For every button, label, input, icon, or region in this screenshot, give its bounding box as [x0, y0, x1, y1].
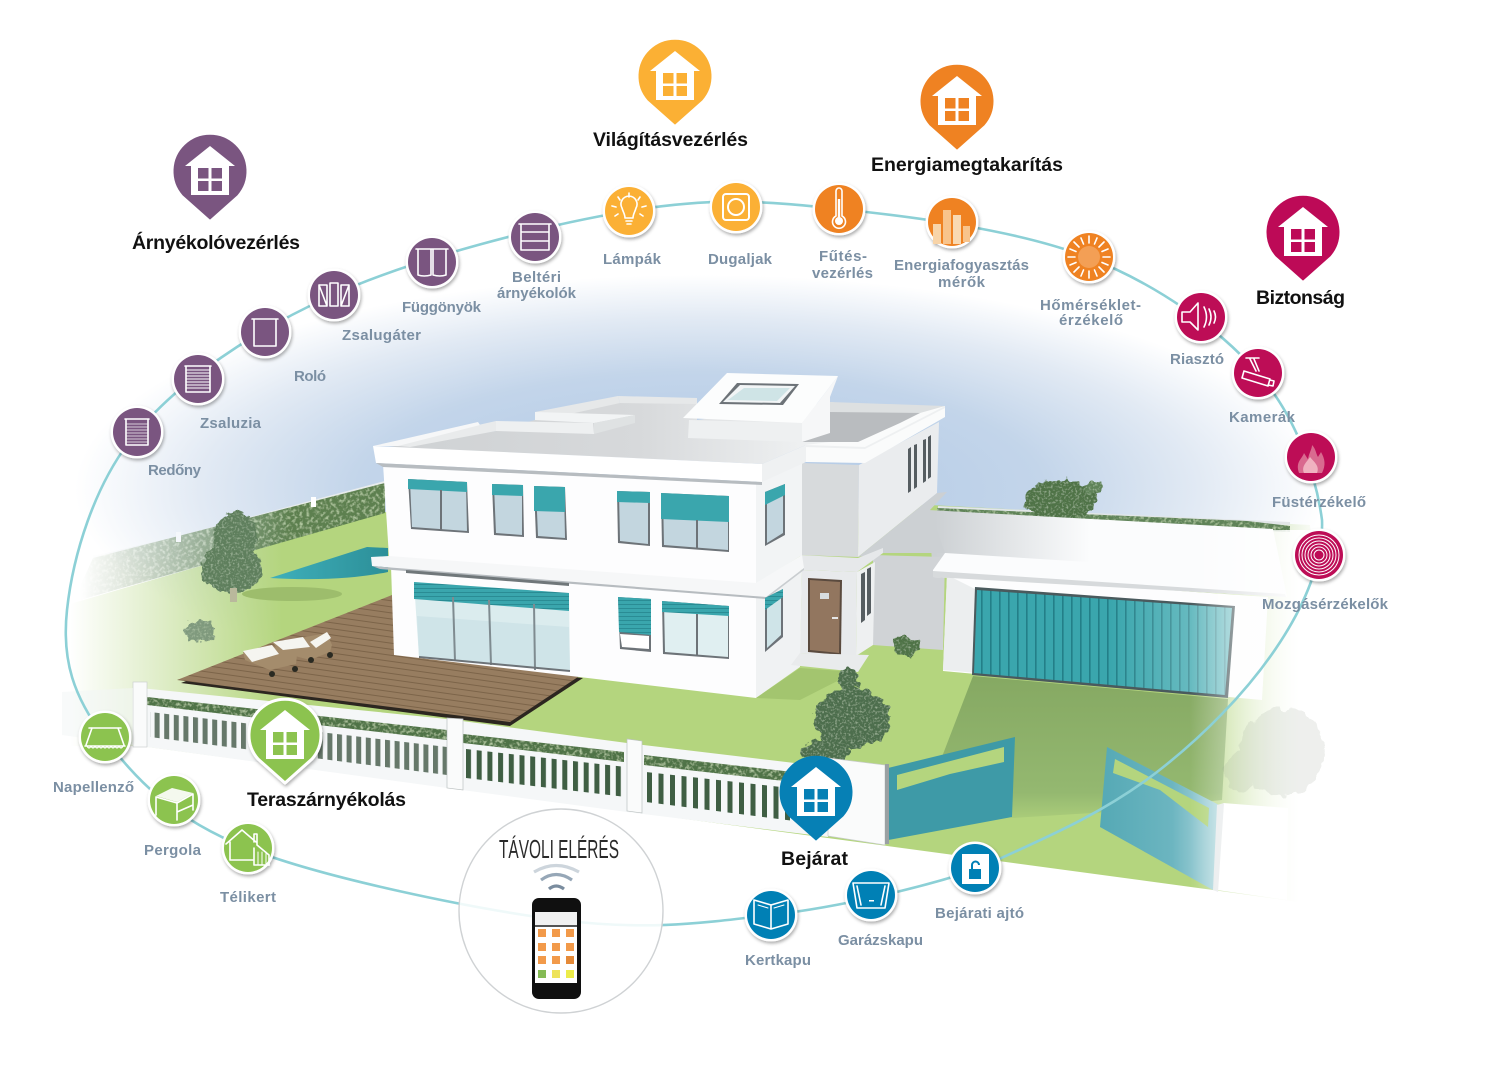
tree behind garage	[1024, 480, 1103, 520]
ground lawn	[70, 505, 1330, 905]
fence posts	[133, 682, 885, 845]
tree left	[201, 512, 261, 593]
roof deck dark part	[802, 412, 925, 442]
label: Energiafogyasztás mérők: Energiafogyasztás	[894, 257, 1029, 274]
node: Lámpák	[602, 184, 656, 238]
node: Garázskapu	[844, 868, 898, 922]
tree front	[802, 667, 890, 762]
icon: wifi waves	[534, 866, 579, 889]
label: Zsaluzia: Zsaluzia	[200, 415, 262, 432]
upper wall	[383, 464, 756, 584]
pin: Energiamegtakarítás	[921, 65, 993, 149]
node: Kertkapu	[744, 888, 798, 942]
shaded driveway	[935, 676, 1228, 818]
label: Redőny: Redőny	[148, 462, 202, 479]
house shadow on lawn	[756, 668, 855, 700]
upper windows	[408, 479, 785, 552]
label: Riasztó: Riasztó	[1170, 351, 1224, 368]
lower wall	[391, 566, 756, 698]
heading: Árnyékolóvezérlés: Árnyékolóvezérlés	[132, 231, 300, 254]
orbit line	[66, 202, 1322, 925]
pin: Árnyékolóvezérlés	[174, 135, 246, 219]
label: Napellenző: Napellenző	[53, 779, 134, 796]
remote access heading: TÁVOLI ELÉRÉS	[499, 834, 619, 864]
label: Dugaljak: Dugaljak	[708, 251, 773, 268]
bush by door	[894, 636, 920, 656]
right gate	[1100, 747, 1223, 890]
label: Fűtésvezérlés: vezérlés	[812, 265, 873, 282]
heading: Teraszárnyékolás: Teraszárnyékolás	[247, 789, 406, 811]
rim shading	[805, 406, 945, 449]
label: Bejárati ajtó: Bejárati ajtó	[935, 905, 1024, 922]
roof deck	[389, 402, 925, 464]
label: Garázskapu: Garázskapu	[838, 932, 923, 949]
right fade overlay	[1190, 530, 1330, 930]
back fence and hedge right	[937, 506, 1290, 532]
label: Mozgásérzékelők: Mozgásérzékelők	[1262, 596, 1389, 613]
wooden deck	[177, 595, 583, 726]
node: Télikert	[222, 822, 274, 874]
node: Napellenző	[78, 710, 132, 764]
fence	[133, 682, 885, 845]
label: Füstérzékelő: Füstérzékelő	[1272, 494, 1366, 511]
remote access circle	[459, 809, 663, 1013]
node: Zsalugáter	[308, 268, 360, 322]
skylight block	[683, 373, 838, 442]
right gate pillar	[1213, 803, 1288, 900]
node: Bejárati ajtó	[948, 842, 1002, 894]
node: Zsaluzia	[172, 352, 224, 406]
bush left	[185, 620, 215, 642]
label: Beltéri árnyékolók: árnyékolók	[497, 285, 577, 302]
node: Beltéri árnyékolók	[508, 210, 562, 264]
pin: Világításvezérlés	[639, 40, 711, 124]
pin: Bejárat	[780, 756, 852, 840]
label: Zsalugáter: Zsalugáter	[342, 327, 421, 344]
node: Függönyök	[406, 236, 458, 288]
tree trunk left	[230, 588, 237, 602]
label: Függönyök: Függönyök	[402, 299, 482, 316]
heading: Bejárat: Bejárat	[781, 848, 848, 870]
label: Hőmérséklet-érzékelő: Hőmérséklet-	[1040, 297, 1141, 314]
tree shadow	[242, 587, 342, 601]
node: Füstérzékelő	[1284, 430, 1338, 484]
rear wing	[800, 422, 947, 656]
garage	[873, 510, 1287, 700]
heading: Biztonság: Biztonság	[1256, 287, 1345, 309]
node: Fűtésvezérlés	[812, 182, 866, 236]
label: Beltéri árnyékolók: Beltéri	[512, 269, 561, 286]
ghost fence left	[62, 688, 133, 745]
roof slab	[373, 422, 806, 485]
label: Télikert: Télikert	[220, 889, 276, 906]
ghost tree right	[1226, 708, 1324, 796]
awning bar	[406, 570, 569, 586]
swimming pool	[270, 547, 388, 579]
node: Riasztó	[1174, 290, 1228, 344]
back hedge left	[73, 481, 385, 602]
label: Lámpák: Lámpák	[603, 251, 662, 268]
label: Roló: Roló	[294, 368, 326, 385]
label: Kamerák: Kamerák	[1229, 409, 1296, 426]
node: Hőmérséklet-érzékelő	[1062, 230, 1116, 284]
entrance door	[791, 578, 869, 672]
label: Pergola: Pergola	[144, 842, 202, 859]
node: Pergola	[148, 774, 200, 826]
label: Fűtésvezérlés: Fűtés-	[819, 248, 867, 265]
label: Hőmérséklet-érzékelő: érzékelő	[1059, 312, 1123, 329]
left gate	[885, 737, 1015, 844]
heading: Világításvezérlés: Világításvezérlés	[593, 129, 748, 151]
node: Mozgásérzékelők	[1292, 528, 1346, 582]
node: Energiafogyasztás mérők	[926, 196, 978, 248]
node: Dugaljak	[710, 180, 762, 234]
main house	[371, 373, 947, 698]
label: Kertkapu: Kertkapu	[745, 952, 811, 969]
sun loungers	[243, 632, 333, 677]
rear wing rim	[805, 406, 945, 463]
terrace doors	[414, 582, 570, 671]
rear parapets	[389, 396, 945, 447]
smartphone	[532, 898, 581, 999]
pin: Biztonság	[1267, 196, 1339, 280]
node: Kamerák	[1232, 346, 1284, 400]
lower windows	[618, 589, 783, 659]
heading: Energiamegtakarítás: Energiamegtakarítás	[871, 154, 1063, 176]
label: Energiafogyasztás mérők: mérők	[938, 274, 986, 291]
floor band	[371, 555, 804, 599]
node: Roló	[238, 306, 292, 358]
node: Redőny	[110, 406, 164, 458]
pin: Teraszárnyékolás	[249, 699, 321, 783]
